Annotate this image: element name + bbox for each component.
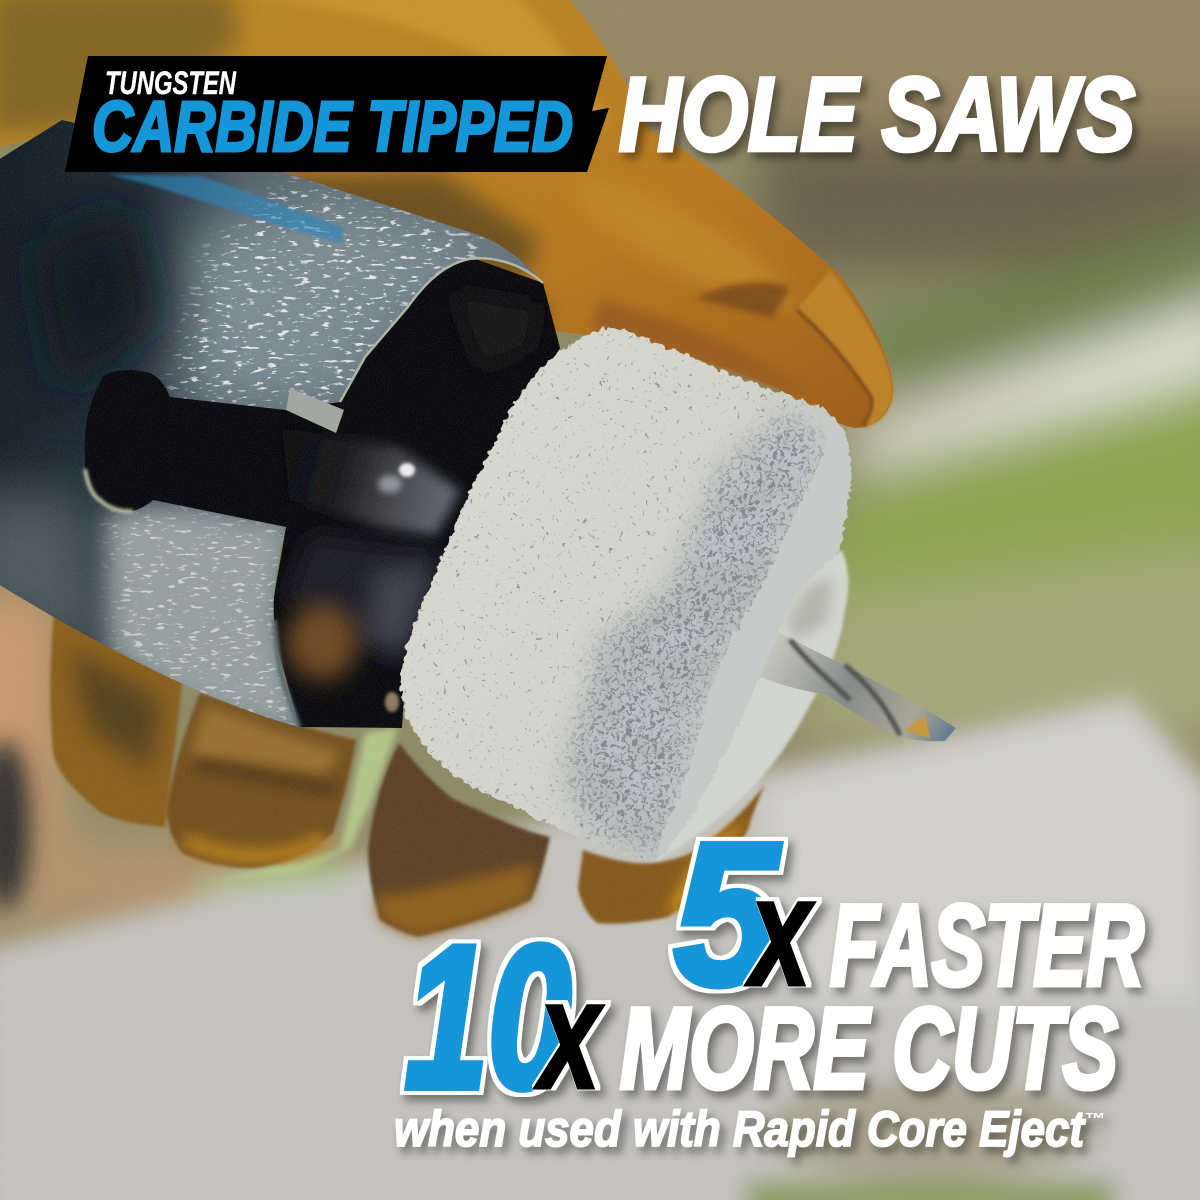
icon: drill bit <box>760 630 956 741</box>
icon: green gap between fingers <box>210 727 398 882</box>
icon: wall edge fold <box>274 620 299 727</box>
heading badge: Tungsten Carbide Tipped <box>65 56 609 172</box>
number: 10: 10 <box>405 904 571 1131</box>
icon: core side band and face <box>390 320 851 870</box>
icon: carbide tooth <box>286 388 344 433</box>
text: Rapid Core Eject note: ™ <box>1084 1111 1105 1128</box>
label on saw <box>108 174 344 243</box>
icon: slot rim <box>85 469 133 511</box>
icon: arbor shaft <box>282 428 460 535</box>
text: x: x <box>745 845 815 1019</box>
icon: saw lip edge <box>340 258 543 402</box>
number: 5: 5 <box>674 801 781 1028</box>
callout: 10x more cuts <box>405 904 1118 1131</box>
photo: hole saw cylinder <box>0 110 560 740</box>
text: Tungsten: TUNGSTEN <box>105 65 237 101</box>
text: Rapid Core Eject note: when used with Rapid Core Eject <box>394 1101 1086 1157</box>
text: x: x <box>534 948 604 1122</box>
icon: upper glove <box>0 0 893 428</box>
callout: 5x faster <box>674 801 1144 1028</box>
icon: lower fingers <box>50 610 765 937</box>
icon: fingertip flap <box>797 270 893 426</box>
photo: gloved hand <box>0 0 893 937</box>
photo: concrete core with drill bit <box>390 320 956 870</box>
icon: back of core <box>656 550 848 862</box>
text: Carbide Tipped: CARBIDE TIPPED <box>92 88 573 167</box>
icon: saw interior <box>82 250 560 728</box>
icon: saw wall <box>0 110 560 740</box>
